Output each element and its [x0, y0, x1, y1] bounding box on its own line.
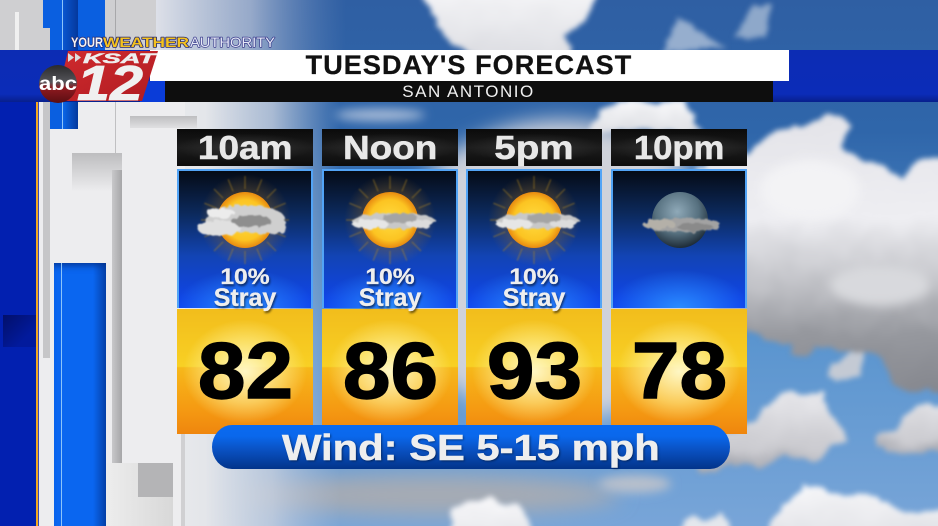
logo: KSAT 12 abc [39, 50, 158, 106]
logo: KSAT 12 abc: abc [39, 74, 77, 95]
column 3 temperature [466, 309, 602, 434]
column 1 temperature [177, 309, 313, 434]
column 3 temperature: 93 [486, 326, 582, 415]
column 2 header: Noon [343, 129, 437, 166]
subtitle bar: SAN ANTONIO [402, 82, 535, 101]
precipitation text: 10% [365, 264, 415, 289]
column 3 condition panel: Stray [503, 284, 565, 312]
tagline: your weather authority: YOUR [71, 34, 103, 50]
column 2 header [322, 129, 458, 166]
column 3 condition panel [466, 169, 602, 308]
subtitle bar [165, 81, 773, 102]
tagline: your weather authority: AUTHORITY [190, 34, 276, 50]
top banner band [0, 50, 938, 102]
column 2 temperature: 86 [342, 326, 438, 415]
column 3 header [466, 129, 602, 166]
column 1 header: 10am [198, 129, 292, 166]
wind pill: Wind: SE 5-15 mph [282, 427, 660, 468]
column 1 header [177, 129, 313, 166]
tagline: your weather authority: WEATHER [103, 34, 189, 50]
column 4 temperature: 78 [631, 326, 727, 415]
wind pill [212, 425, 730, 469]
logo: KSAT 12 abc: KSAT [83, 50, 158, 66]
band accent behind logo [140, 81, 165, 102]
column 2 condition panel: Stray [359, 284, 421, 312]
icon: sun behind large cloud [196, 175, 290, 265]
icon: moon behind cloud [642, 192, 720, 248]
column 4 header: 10pm [634, 129, 724, 166]
icon: sun behind thin cloud [345, 175, 437, 265]
column 3 header: 5pm [494, 129, 574, 166]
column 4 condition panel [611, 169, 747, 308]
tagline: your weather authority [71, 34, 276, 50]
left side graphic panel [0, 0, 197, 526]
column 1 temperature: 82 [197, 326, 293, 415]
icon: sun behind thin cloud [489, 175, 581, 265]
precipitation text: 10% [509, 264, 559, 289]
column 4 temperature [611, 309, 747, 434]
column 1 condition panel: Stray [214, 284, 276, 312]
title bar [150, 50, 789, 81]
column 1 condition panel [177, 169, 313, 308]
column 2 condition panel [322, 169, 458, 308]
title bar: TUESDAY'S FORECAST [306, 50, 632, 80]
blue left bar [0, 102, 36, 526]
column 4 header [611, 129, 747, 166]
column 2 temperature [322, 309, 458, 434]
blue lower block [54, 263, 106, 526]
precipitation text: 10% [220, 264, 270, 289]
